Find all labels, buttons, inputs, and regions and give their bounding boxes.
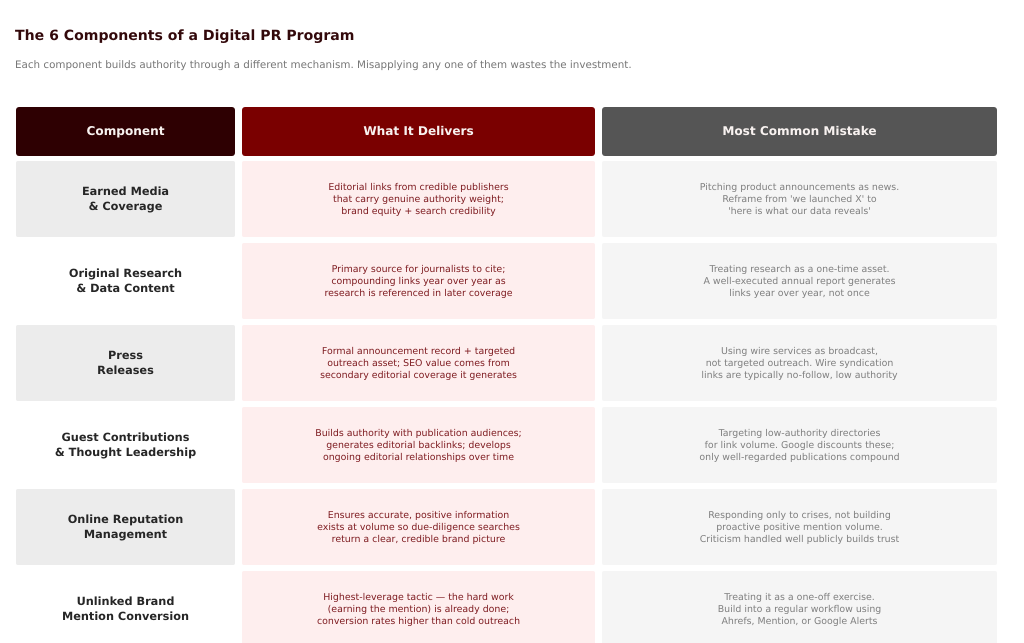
- row 1 component: [16, 161, 235, 237]
- row 4 component: Guest Contributions: [62, 431, 189, 444]
- row 3 mistake: Using wire services as broadcast,: [721, 346, 878, 356]
- row 4 component: & Thought Leadership: [55, 446, 196, 458]
- row 4 mistake: [602, 407, 997, 483]
- row 1 delivers: brand equity + search credibility: [341, 206, 496, 216]
- row 6 mistake: [602, 571, 997, 643]
- row 3 mistake: [602, 325, 997, 401]
- row 4 delivers: [242, 407, 595, 483]
- row 5 mistake: proactive positive mention volume.: [716, 522, 883, 532]
- row 3 mistake: links are typically no-follow, low authority: [701, 370, 898, 380]
- row 2 component: Original Research: [69, 267, 182, 280]
- row 6 component: Unlinked Brand: [77, 595, 174, 608]
- row 2 mistake: [602, 243, 997, 319]
- row 6 delivers: (earning the mention) is already done;: [328, 604, 509, 614]
- row 6 delivers: Highest-leverage tactic — the hard work: [323, 592, 514, 602]
- header: component: Component: [87, 124, 164, 138]
- header: what it delivers: [242, 107, 595, 156]
- row 6 mistake: Ahrefs, Mention, or Google Alerts: [722, 616, 877, 626]
- row 1 delivers: that carry genuine authority weight;: [333, 194, 504, 204]
- row 4 mistake: only well-regarded publications compound: [699, 452, 900, 462]
- row 6 component: Mention Conversion: [62, 610, 189, 622]
- row 1 delivers: [242, 161, 595, 237]
- row 3 mistake: not targeted outreach. Wire syndication: [706, 358, 893, 368]
- row 1 mistake: [602, 161, 997, 237]
- row 4 mistake: for link volume. Google discounts these;: [705, 440, 894, 450]
- row 1 component: Earned Media: [82, 185, 169, 198]
- row 1 mistake: Pitching product announcements as news.: [700, 182, 899, 192]
- row 3 delivers: outreach asset; SEO value comes from: [327, 358, 510, 368]
- row 6 component: [62, 595, 189, 622]
- row 4 delivers: generates editorial backlinks; develops: [326, 440, 511, 450]
- row 3 delivers: [242, 325, 595, 401]
- row 3 delivers: secondary editorial coverage it generates: [320, 370, 517, 380]
- row 6 delivers: conversion rates higher than cold outreach: [317, 616, 520, 626]
- row 6 delivers: [242, 571, 595, 643]
- row 3 delivers: Formal announcement record + targeted: [322, 346, 515, 356]
- row 5 mistake: Criticism handled well publicly builds trust: [700, 534, 899, 544]
- row 5 mistake: [602, 489, 997, 565]
- row 2 delivers: research is referenced in later coverage: [324, 288, 512, 298]
- row 4 component: [55, 431, 196, 458]
- row 5 component: Online Reputation: [68, 513, 183, 526]
- row 1 mistake: Reframe from 'we launched X' to: [722, 194, 877, 204]
- row 4 delivers: Builds authority with publication audiences;: [315, 428, 522, 438]
- row 2 component: [69, 267, 182, 294]
- row 2 component: & Data Content: [76, 282, 175, 294]
- header: component: [16, 107, 235, 156]
- header: most common mistake: [602, 107, 997, 156]
- title: The 6 Components of a Digital PR Program: [15, 28, 354, 44]
- row 6 mistake: Build into a regular workflow using: [718, 604, 881, 614]
- row 3 component: [16, 325, 235, 401]
- row 1 component: & Coverage: [89, 200, 162, 212]
- row 4 mistake: Targeting low-authority directories: [719, 428, 880, 438]
- row 2 delivers: compounding links year over year as: [331, 276, 506, 286]
- row 6 mistake: Treating it as a one-off exercise.: [724, 592, 875, 602]
- row 2 mistake: Treating research as a one-time asset.: [709, 264, 890, 274]
- row 3 component: Press: [108, 349, 143, 362]
- row 5 mistake: Responding only to crises, not building: [708, 510, 891, 520]
- header: most common mistake: Most Common Mistake: [722, 124, 877, 138]
- row 2 mistake: links year over year, not once: [729, 288, 870, 298]
- row 5 component: Management: [84, 528, 167, 540]
- subtitle: Each component builds authority through a different mechanism. Misapplying any one of them wastes the investment.: [15, 58, 632, 70]
- row 2 delivers: Primary source for journalists to cite;: [332, 264, 505, 274]
- row 5 delivers: [242, 489, 595, 565]
- row 1 mistake: 'here is what our data reveals': [728, 206, 871, 216]
- row 5 component: [16, 489, 235, 565]
- row 2 delivers: [242, 243, 595, 319]
- header: what it delivers: What It Delivers: [363, 124, 474, 138]
- row 2 mistake: A well-executed annual report generates: [703, 276, 896, 286]
- row 5 delivers: exists at volume so due-diligence searches: [317, 522, 520, 532]
- row 5 delivers: return a clear, credible brand picture: [332, 534, 505, 544]
- row 3 component: Releases: [97, 364, 154, 376]
- row 5 delivers: Ensures accurate, positive information: [328, 510, 509, 520]
- row 1 delivers: Editorial links from credible publishers: [328, 182, 509, 192]
- row 4 delivers: ongoing editorial relationships over time: [323, 452, 514, 462]
